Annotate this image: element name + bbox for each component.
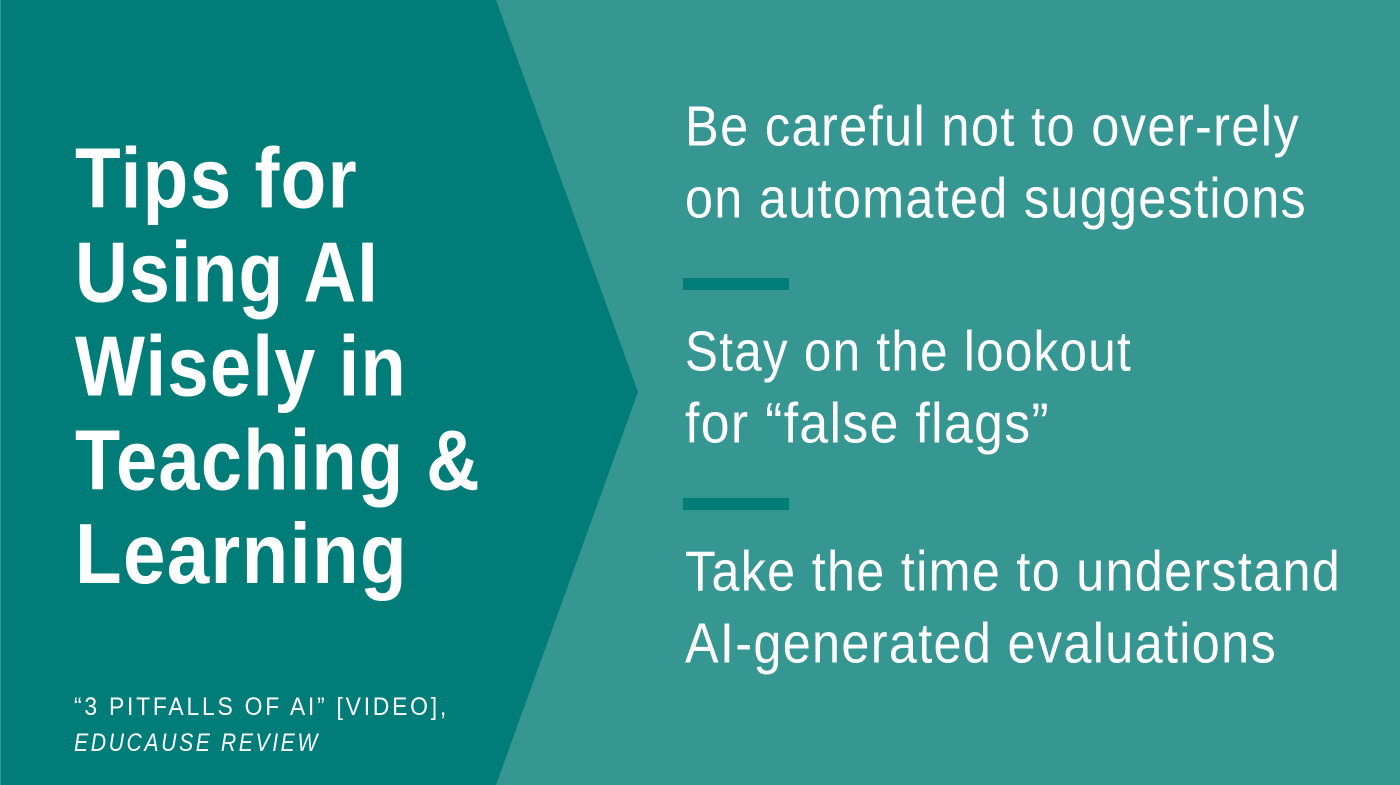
tip 3	[685, 540, 1341, 676]
tip 1: on automated suggestions	[685, 166, 1307, 230]
source citation	[74, 693, 449, 757]
tip 2: Stay on the lookout	[685, 320, 1132, 384]
title: Tips for	[75, 132, 358, 226]
tip 1	[685, 94, 1307, 230]
title	[75, 132, 481, 602]
panel: left chevron	[1, 0, 638, 785]
tip 2: for “false flags”	[685, 392, 1050, 456]
title: Teaching &	[75, 414, 481, 508]
tip 1: Be careful not to over-rely	[685, 94, 1300, 158]
title: Learning	[75, 507, 408, 602]
divider 2	[683, 498, 789, 510]
tip 3: AI-generated evaluations	[685, 612, 1277, 676]
tip 2	[685, 320, 1132, 456]
source citation: “3 PITFALLS OF AI” [VIDEO],	[74, 693, 449, 721]
source citation: EDUCAUSE REVIEW	[74, 729, 320, 757]
divider 1	[683, 278, 789, 290]
title: Using AI	[75, 226, 379, 320]
title: Wisely in	[75, 320, 407, 414]
